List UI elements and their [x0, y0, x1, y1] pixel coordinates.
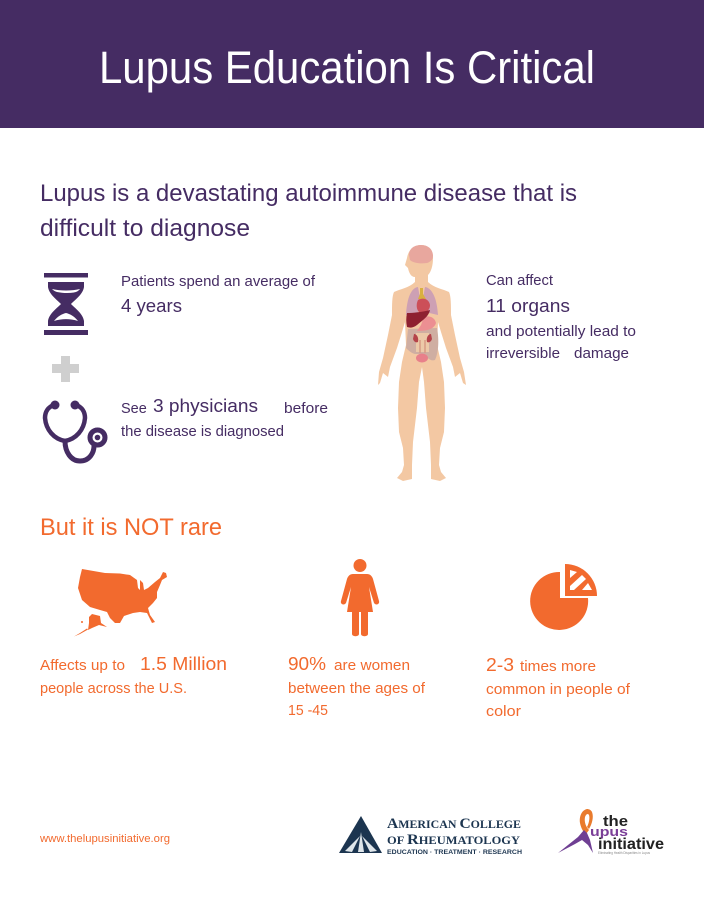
text: women: 15 -45: [288, 703, 328, 719]
ribbon: [580, 809, 593, 834]
section heading: devastating disease: [40, 180, 577, 242]
text: organs: Can affect: [486, 273, 553, 289]
liver: [406, 310, 430, 328]
icon: woman: [341, 559, 379, 636]
section heading: devastating disease: difficult to diagnose: [40, 215, 250, 242]
text: women: between the ages of: [288, 681, 426, 697]
lungs: [406, 287, 438, 315]
text: average years: 4 years: [121, 295, 182, 316]
intestines: [406, 328, 438, 360]
icon: hourglass: [44, 273, 88, 335]
icon: plus: [52, 356, 79, 382]
section heading: devastating disease: Lupus is a devastating autoimmune disease that is: [40, 180, 577, 207]
text: physicians: the disease is diagnosed: [121, 424, 284, 440]
footer URL: www.thelupusinitiative.org: [39, 833, 170, 845]
ureter: [420, 340, 425, 353]
text: 1.5 million: 1.5 Million: [140, 653, 227, 674]
text: women: [288, 653, 426, 719]
logo wordmark: AMERICAN COLLEGE: [387, 816, 521, 832]
bladder: [416, 354, 428, 362]
logo wordmark: initiative: [598, 836, 664, 853]
icon: USA map: [74, 569, 167, 636]
logo wordmark: upus: [590, 824, 628, 839]
logo wordmark: EDUCATION · TREATMENT · RESEARCH: [387, 849, 522, 856]
logo wordmark: Eliminating Health Disparities in Lupus: [598, 850, 650, 855]
header banner: [0, 0, 704, 128]
text: average years: Patients spend an average of: [121, 274, 316, 290]
logo: American College of Rheumatology: [339, 816, 522, 856]
logo: the lupus initiative: [558, 809, 664, 855]
text: women: 90%: [288, 653, 326, 674]
text: times more common: 2-3: [486, 654, 514, 675]
brain: [409, 245, 433, 263]
human body illustration: [378, 245, 466, 481]
logo wordmark: the: [603, 814, 628, 830]
text: physicians: 3 physicians: [153, 395, 258, 416]
heart: [417, 299, 430, 313]
text: times more common: [486, 654, 631, 720]
text: organs: and potentially lead to: [486, 324, 636, 340]
kidneys: [413, 334, 432, 342]
icon: stethoscope: [45, 400, 105, 461]
text: times more common: color: [486, 704, 521, 720]
logo wordmark: [590, 814, 664, 855]
section heading: not rare: But it is NOT rare: [40, 514, 222, 541]
text: organs: damage: [574, 346, 629, 362]
logo wordmark: [387, 816, 522, 856]
intestines centre: [416, 333, 429, 352]
text: organs: 11 organs: [486, 295, 570, 316]
text: women: are women: [334, 658, 410, 674]
text: times more common: times more: [520, 659, 596, 675]
text: physicians: See: [121, 401, 147, 417]
text: 1.5 million: Affects up to: [40, 658, 125, 674]
logo wordmark: OF RHEUMATOLOGY: [387, 832, 521, 848]
text: times more common: common in people of: [486, 682, 631, 698]
icon: pie chart: [530, 564, 597, 630]
text: physicians: [121, 395, 328, 440]
title: Lupus Education Is Critical: [99, 42, 595, 93]
trachea: [418, 288, 426, 299]
text: organs: irreversible: [486, 346, 560, 362]
stomach: [417, 316, 436, 331]
text: organs: [486, 273, 636, 362]
body silhouette: [378, 245, 466, 481]
text: 1.5 million: [40, 653, 227, 697]
text: physicians: before: [284, 401, 328, 417]
logo triangle: [339, 816, 382, 853]
text: 1.5 million: people across the U.S.: [40, 681, 187, 697]
text: average years: [121, 274, 316, 316]
